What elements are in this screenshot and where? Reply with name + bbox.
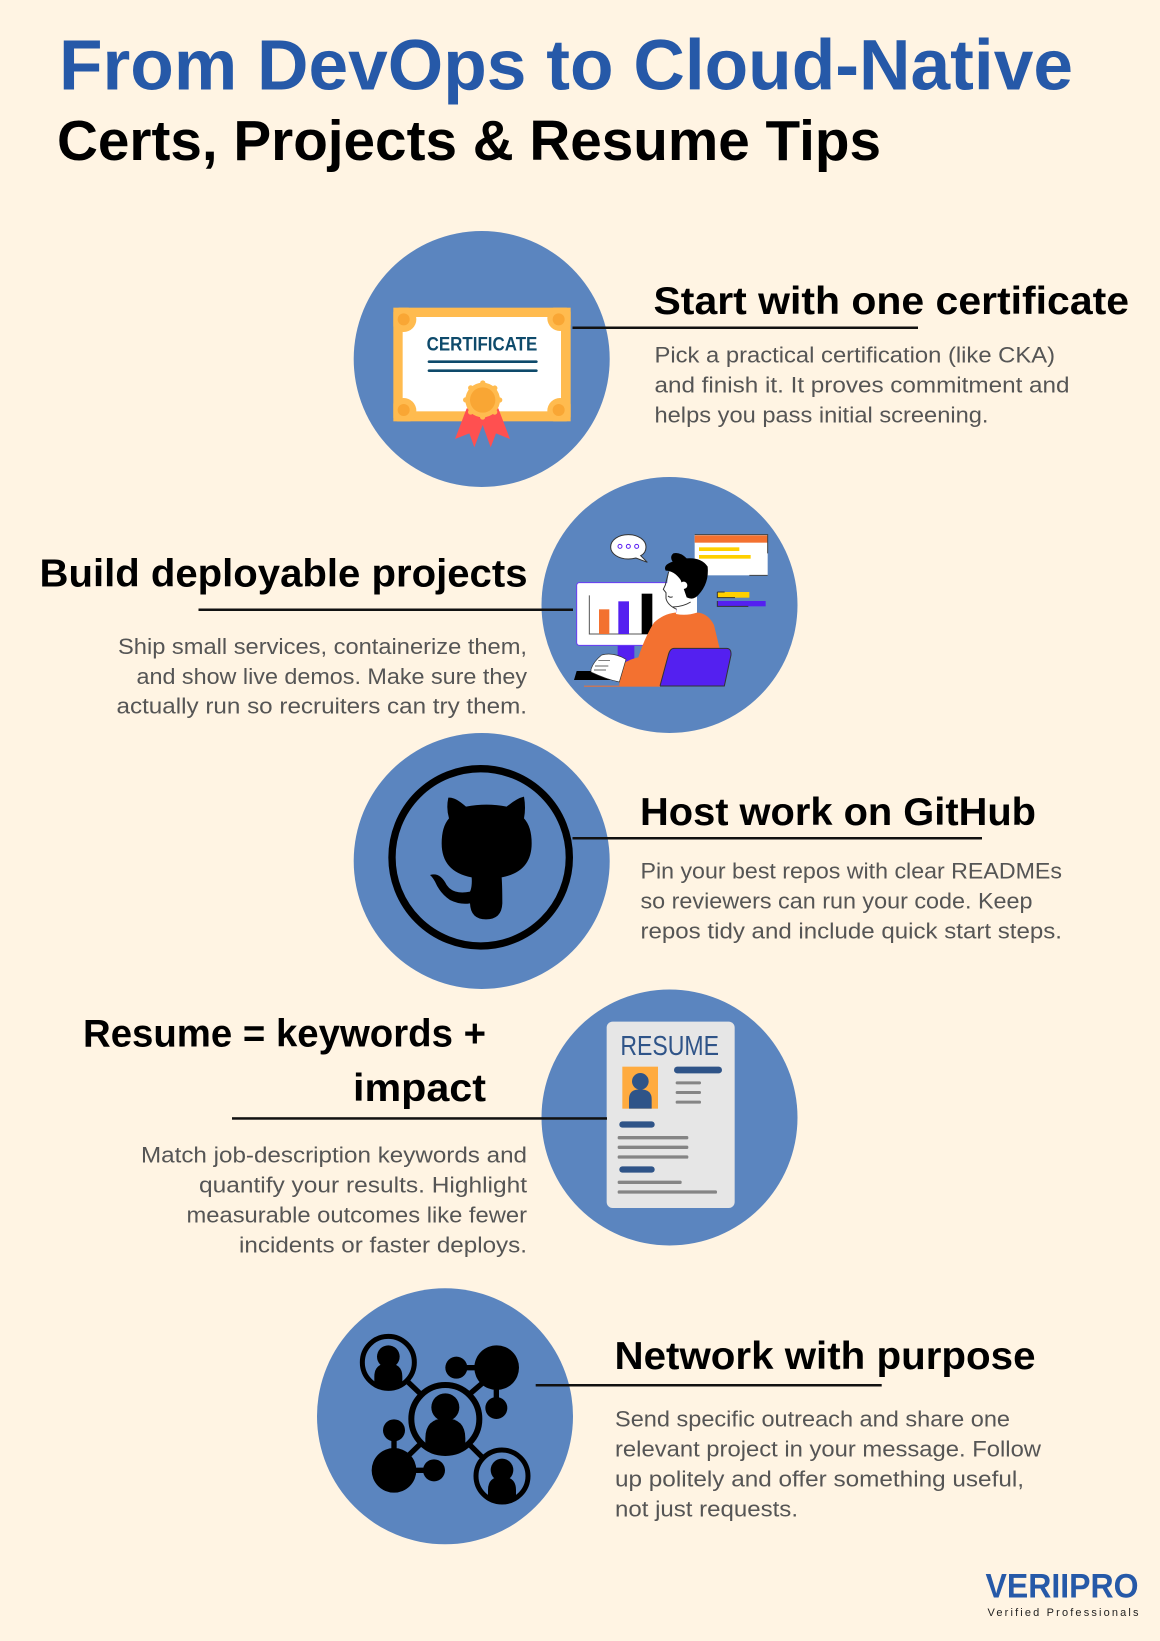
icon: people network [362, 1336, 528, 1505]
body text: and finish it. It proves commitment and [654, 372, 1070, 397]
connector line [572, 326, 918, 329]
panel: start with one certificate [354, 231, 1129, 487]
body text: Ship small services, containerize them, [118, 634, 527, 659]
body text: incidents or faster deploys. [239, 1233, 527, 1258]
body text [640, 858, 1062, 943]
title: Certs, Projects & Resume Tips [57, 109, 881, 173]
body text: up politely and offer something useful, [615, 1467, 1024, 1492]
heading: Resume = keywords + [83, 1013, 486, 1056]
title: From DevOps to Cloud-Native [59, 26, 1073, 106]
body text: and show live demos. Make sure they [136, 664, 528, 689]
heading: Build deployable projects [40, 553, 528, 596]
heading: Start with one certificate [654, 280, 1129, 323]
connector line [572, 837, 982, 840]
connector line [198, 608, 573, 611]
icon: certificate [391, 306, 573, 447]
heading: impact [353, 1067, 486, 1110]
body text: Match job-description keywords and [141, 1143, 527, 1168]
body text: Pick a practical certification (like CKA) [654, 342, 1055, 367]
panel: resume keywords and impact [83, 990, 798, 1258]
icon: certificate: CERTIFICATE [427, 335, 537, 356]
body text: so reviewers can run your code. Keep [640, 888, 1032, 913]
icon: github cat [392, 769, 569, 946]
heading [83, 1013, 486, 1110]
body text [654, 342, 1070, 427]
body text: Pin your best repos with clear READMEs [640, 858, 1062, 883]
body text [141, 1143, 528, 1258]
body text: quantify your results. Highlight [199, 1173, 528, 1198]
panel: host work on github [354, 733, 1062, 989]
icon: resume [607, 1022, 735, 1208]
panel: build deployable projects [40, 477, 798, 733]
connector line [536, 1384, 882, 1386]
body text [615, 1407, 1042, 1522]
connector line [232, 1117, 607, 1120]
panel: network with purpose [317, 1288, 1042, 1544]
logo: veriipro: VERIIPRO [986, 1568, 1138, 1606]
body text: helps you pass initial screening. [654, 402, 988, 427]
icon: developer at computer [574, 535, 768, 687]
heading: Host work on GitHub [640, 791, 1036, 834]
heading: Network with purpose [614, 1335, 1036, 1378]
body text: measurable outcomes like fewer [186, 1203, 528, 1228]
icon: resume: RESUME [620, 1030, 719, 1061]
body text: Send specific outreach and share one [615, 1407, 1010, 1432]
logo: veriipro: Verified Professionals [988, 1607, 1139, 1619]
title [57, 26, 1073, 173]
body text: actually run so recruiters can try them. [116, 694, 527, 718]
body text: relevant project in your message. Follow [615, 1437, 1042, 1462]
body text: repos tidy and include quick start steps. [640, 918, 1062, 943]
body text [116, 634, 528, 718]
body text: not just requests. [615, 1497, 798, 1522]
